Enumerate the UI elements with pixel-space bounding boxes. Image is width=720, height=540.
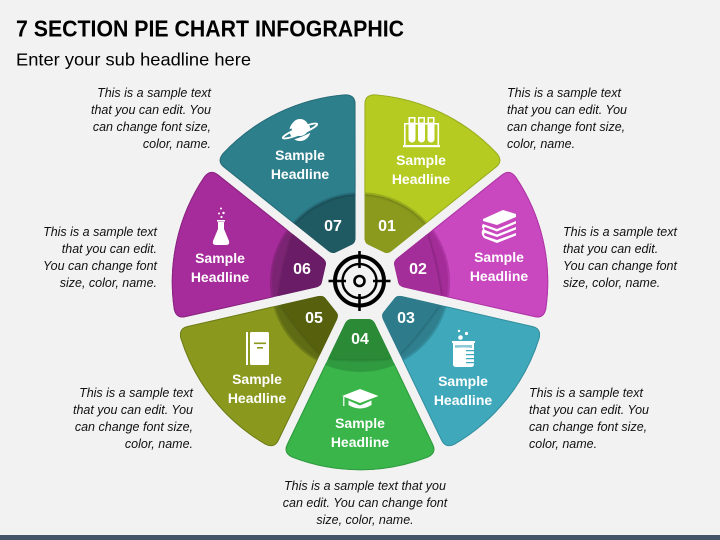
icon: test tubes: [403, 117, 440, 147]
headline 07: Sample: [275, 147, 325, 163]
shape 01: [364, 94, 500, 254]
segment 02: [394, 172, 548, 318]
headline 03: Headline: [434, 392, 492, 408]
shape 05: [180, 296, 338, 446]
text block 06: This is a sample text: [43, 225, 158, 239]
headline 01: Headline: [392, 171, 450, 187]
shape 04: [286, 319, 434, 470]
icon: books: [482, 210, 516, 243]
headline 02: Headline: [470, 268, 528, 284]
headline 01: Sample: [396, 152, 446, 168]
segment 04: [286, 319, 434, 470]
headline 05: Sample: [232, 371, 282, 387]
headline 05: Headline: [228, 390, 286, 406]
bottom bar: [0, 535, 720, 540]
icon: flask: [213, 208, 229, 245]
text block 06: that you can edit.: [62, 242, 157, 256]
shape 02: [394, 172, 548, 318]
segment 01: [364, 94, 500, 254]
text block 07: that you can edit. You: [91, 103, 211, 117]
icon: planet: [280, 119, 320, 142]
segment 05: [180, 296, 338, 446]
shape 03: [382, 296, 540, 446]
headline 03: Sample: [438, 373, 488, 389]
text block 03: can change font size,: [529, 420, 647, 434]
segment 07: [220, 94, 356, 254]
segment 03: [382, 296, 540, 446]
sub headline: Enter your sub headline here: [16, 50, 251, 70]
title: 7 SECTION PIE CHART INFOGRAPHIC: [16, 16, 404, 42]
text block 05: can change font size,: [75, 420, 193, 434]
number 06: 06: [293, 261, 311, 278]
text block 02: You can change font: [563, 259, 678, 273]
text block 02: size, color, name.: [563, 276, 660, 290]
headline 04: Headline: [331, 434, 389, 450]
shape 07: [220, 94, 356, 254]
number 04: 04: [351, 331, 369, 348]
text block 07: can change font size,: [93, 120, 211, 134]
text block 03: This is a sample text: [529, 386, 643, 400]
shape 06: [172, 172, 326, 318]
text block 03: color, name.: [529, 437, 597, 451]
icon: graduation cap: [342, 389, 378, 408]
text block 01: can change font size,: [507, 120, 625, 134]
icon: target: [328, 251, 390, 311]
headline 04: Sample: [335, 415, 385, 431]
segment 06: [172, 172, 326, 318]
text block 06: size, color, name.: [60, 276, 157, 290]
text block 04: can edit. You can change font: [283, 496, 448, 510]
number 05: 05: [305, 310, 323, 327]
text block 03: that you can edit. You: [529, 403, 649, 417]
headline 06: Sample: [195, 250, 245, 266]
text block 05: color, name.: [125, 437, 193, 451]
number 01: 01: [378, 218, 396, 235]
number 02: 02: [409, 261, 427, 278]
text block 04: size, color, name.: [316, 513, 414, 527]
text block 05: This is a sample text: [79, 386, 194, 400]
icon: beaker: [452, 330, 475, 367]
text block 07: This is a sample text: [97, 86, 212, 100]
text block 02: that you can edit.: [563, 242, 658, 256]
headline 06: Headline: [191, 269, 249, 285]
number labels: [293, 218, 427, 348]
text block 07: color, name.: [143, 137, 211, 151]
headline 07: Headline: [271, 166, 329, 182]
text block 06: You can change font: [43, 259, 158, 273]
icon: notebook: [246, 332, 269, 365]
number 03: 03: [397, 310, 415, 327]
text block 01: This is a sample text: [507, 86, 621, 100]
text block 01: color, name.: [507, 137, 575, 151]
text block 01: that you can edit. You: [507, 103, 627, 117]
text block 05: that you can edit. You: [73, 403, 193, 417]
text block 02: This is a sample text: [563, 225, 677, 239]
text block 04: This is a sample text that you: [284, 479, 446, 493]
number 07: 07: [324, 218, 342, 235]
headline 02: Sample: [474, 249, 524, 265]
